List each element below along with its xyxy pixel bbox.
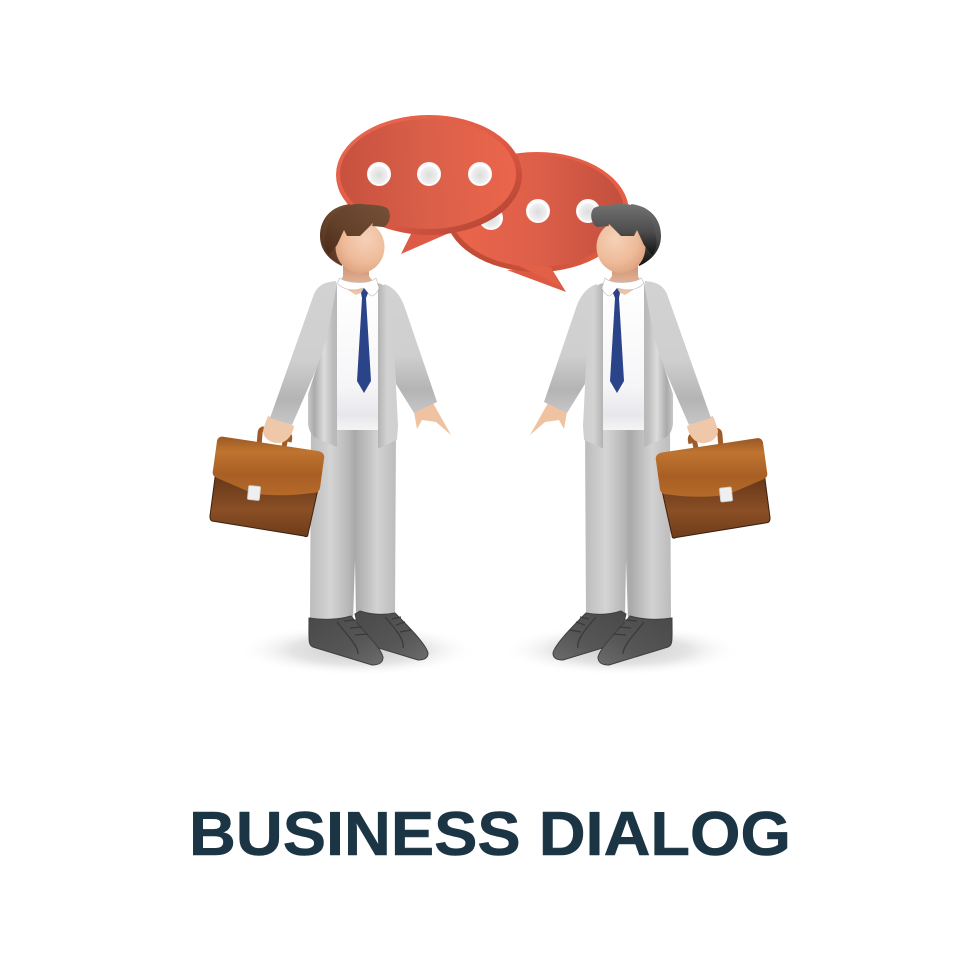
dots left bubble xyxy=(367,162,492,186)
upper body right xyxy=(530,204,718,448)
tie xyxy=(357,288,371,393)
pants xyxy=(585,428,671,620)
pants xyxy=(310,428,396,620)
jacket left panel xyxy=(308,283,337,447)
hand right xyxy=(414,403,451,435)
hair back xyxy=(320,204,350,266)
handle xyxy=(259,429,290,447)
clasp xyxy=(247,485,261,501)
speech bubble left xyxy=(336,115,522,254)
briefcase xyxy=(210,429,324,537)
title: BUSINESS DIALOG xyxy=(189,800,791,869)
briefcase xyxy=(656,431,770,538)
person right xyxy=(530,204,770,665)
collar xyxy=(337,278,379,296)
shoes xyxy=(309,611,428,665)
ground shadow right xyxy=(502,624,742,676)
shoes xyxy=(553,611,672,665)
shirt xyxy=(337,283,379,430)
arm right xyxy=(384,284,437,413)
ground shadow left xyxy=(238,624,478,676)
speech bubble right xyxy=(445,152,629,292)
dots right bubble xyxy=(479,199,600,230)
hair front xyxy=(324,204,390,255)
person left xyxy=(210,204,451,665)
neck xyxy=(337,262,379,295)
jacket right panel xyxy=(378,283,398,448)
face xyxy=(336,221,384,273)
case body xyxy=(210,470,320,537)
hand left xyxy=(263,416,294,443)
arm left xyxy=(270,281,338,425)
flap xyxy=(213,437,324,495)
